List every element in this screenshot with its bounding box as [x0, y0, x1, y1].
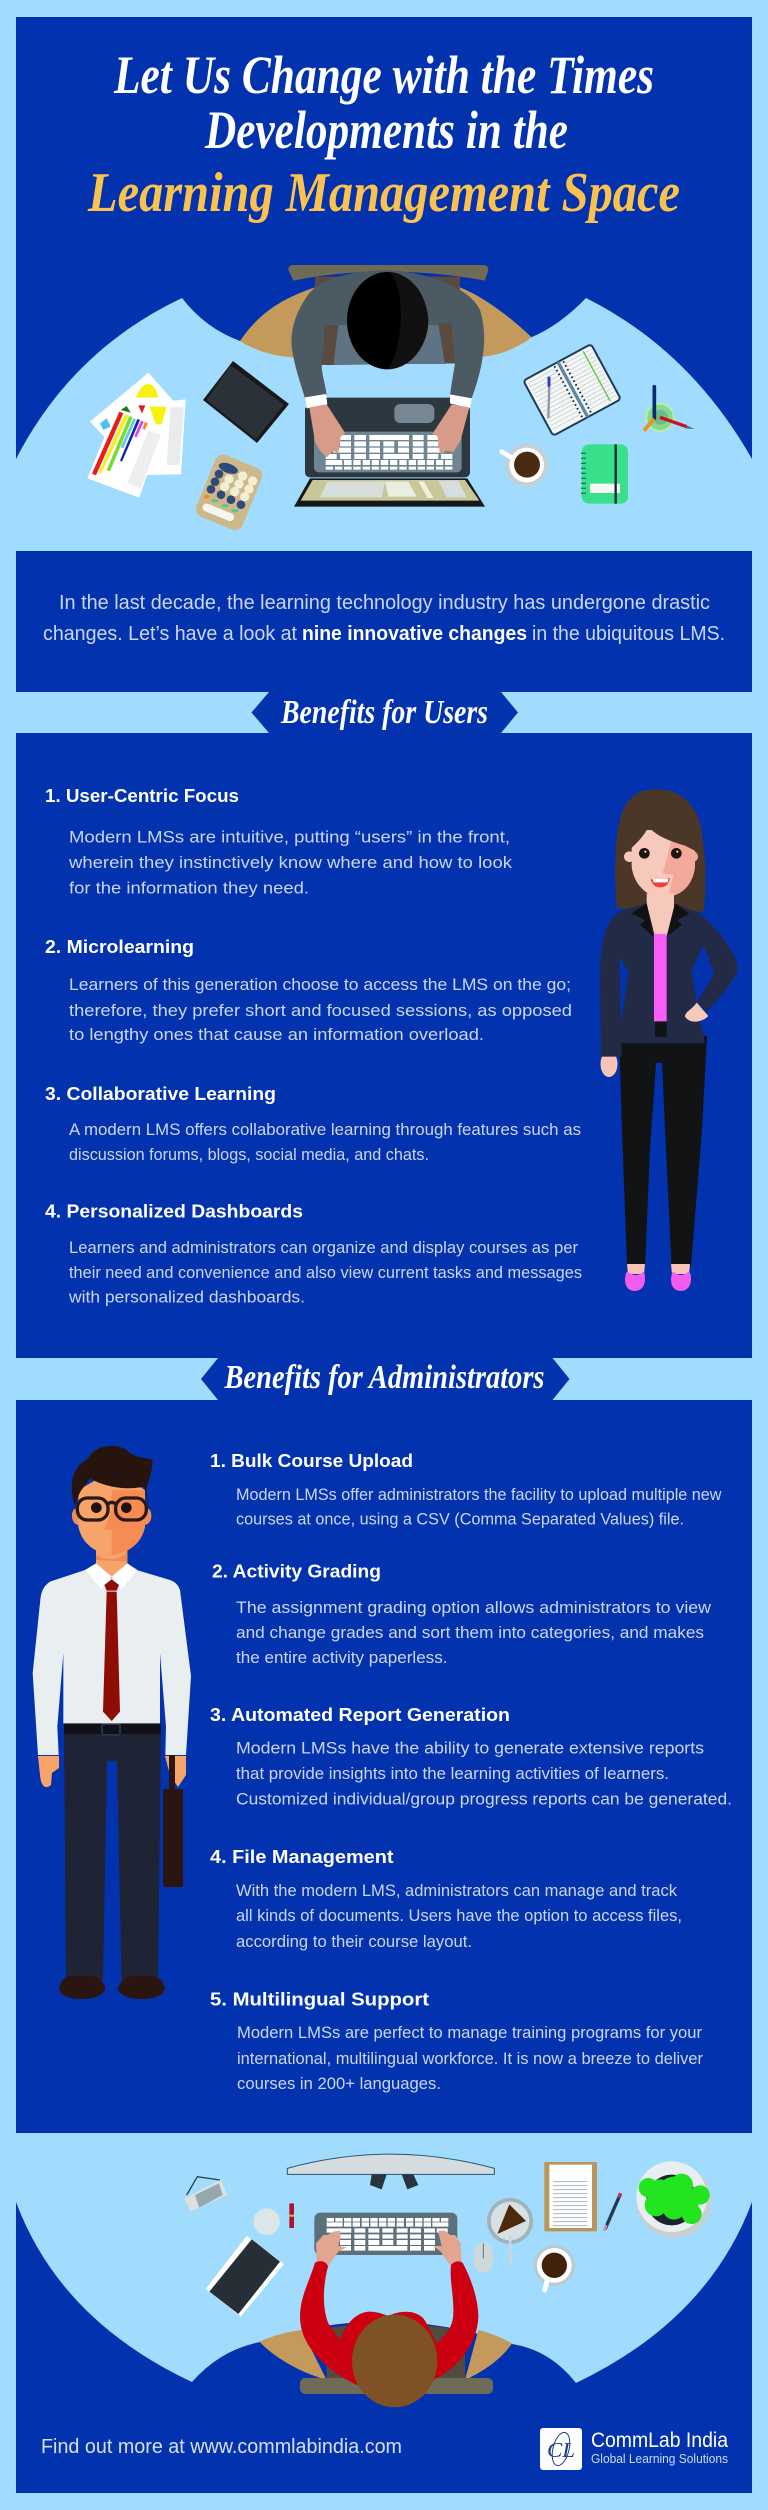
footer blue background	[16, 2133, 752, 2493]
item 4: 4. File Management	[210, 1846, 394, 1867]
item 5: international, multilingual workforce. It is now a breeze to deliver	[237, 2050, 703, 2068]
item 4: their need and convenience and also view current tasks and messages	[69, 1264, 582, 1282]
green ribbon	[583, 351, 610, 401]
hair	[615, 789, 705, 912]
item 3: discussion forums, blogs, social media, and chats.	[69, 1146, 429, 1164]
saucer	[505, 444, 548, 486]
hero blue background	[16, 17, 752, 551]
handle	[545, 2280, 547, 2290]
hands	[309, 404, 469, 457]
tablet screen	[209, 2239, 280, 2314]
label	[590, 484, 620, 493]
hair shine	[387, 273, 428, 369]
mouse	[474, 2243, 493, 2273]
clipboard	[544, 2162, 597, 2231]
holder rim	[645, 403, 675, 432]
keyboard body	[314, 2213, 457, 2255]
screen panel	[438, 481, 467, 497]
spiral spine	[558, 362, 588, 417]
upper body	[600, 789, 738, 1057]
lipstick	[289, 2203, 294, 2228]
torso shading	[333, 325, 445, 364]
teeth	[653, 879, 668, 882]
holder body	[647, 405, 673, 430]
item 4: according to their course layout.	[236, 1933, 472, 1951]
admin background	[16, 1400, 752, 2133]
chair tan base	[240, 287, 532, 357]
cup	[537, 2248, 572, 2283]
calculator cream buttons	[220, 471, 257, 501]
intro line 2: nine innovative changes	[302, 623, 527, 645]
monitor stand	[370, 2174, 418, 2189]
footer desk shape	[16, 2133, 752, 2383]
panel: benefits for administrators	[16, 1400, 752, 2133]
panel: footer	[16, 2133, 752, 2493]
handle	[502, 452, 515, 459]
blue pen	[649, 387, 660, 418]
ribbon: benefits for users: Benefits for Users	[280, 694, 488, 731]
face	[632, 830, 695, 897]
head	[352, 2315, 437, 2407]
cover	[582, 444, 628, 504]
shirt	[33, 1570, 191, 1755]
item 4: Learners and administrators can organize and display courses as per	[69, 1239, 578, 1257]
green notebook	[581, 444, 628, 504]
panel: benefits for users	[16, 733, 752, 1358]
face shade	[663, 840, 695, 897]
buckle	[102, 1724, 120, 1735]
holder inside	[653, 410, 668, 425]
item 2: 2. Microlearning	[45, 936, 194, 957]
saucer	[636, 2161, 707, 2232]
plant	[636, 2161, 711, 2238]
item 2: to lengthy ones that cause an information overload.	[69, 1026, 484, 1044]
eyes	[639, 848, 682, 859]
collar	[85, 1563, 137, 1589]
panel: hero	[16, 17, 752, 551]
item 4: all kinds of documents. Users have the option to access files,	[236, 1907, 682, 1925]
item 2	[212, 1560, 711, 1667]
item 1: wherein they instinctively know where and how to look	[68, 854, 513, 872]
phone screen	[195, 2183, 223, 2208]
intro line 2	[43, 623, 725, 645]
pen cap	[544, 377, 553, 387]
red pen	[660, 417, 687, 427]
item 2: therefore, they prefer short and focused sessions, as opposed	[69, 1002, 572, 1020]
panel: intro	[16, 551, 752, 692]
pen end	[604, 2225, 606, 2231]
monitor	[287, 2154, 494, 2174]
briefcase handle	[169, 1753, 175, 1789]
item 1: Modern LMSs are intuitive, putting “users” in the front,	[69, 828, 510, 846]
tie	[103, 1592, 120, 1721]
pen	[605, 2193, 621, 2229]
item 2: the entire activity paperless.	[236, 1649, 448, 1667]
neck	[647, 893, 674, 937]
logo ring	[549, 2431, 573, 2467]
chair back	[327, 2324, 465, 2385]
paper text block	[167, 407, 184, 465]
mouth	[651, 878, 670, 887]
illustration: desk items right	[474, 2161, 711, 2290]
intro line 2: in the ubiquitous LMS.	[532, 623, 725, 645]
fringe	[628, 820, 698, 852]
jacket	[291, 270, 484, 398]
screen surface	[301, 480, 479, 501]
users background	[16, 733, 752, 1358]
item 2: The assignment grading option allows administrators to view	[236, 1599, 711, 1617]
clipboard lines	[553, 2182, 587, 2226]
item 4	[45, 1200, 582, 1306]
notebook pages	[523, 344, 621, 436]
screen windows	[320, 482, 385, 497]
laptop	[294, 398, 485, 507]
item 1: 1. Bulk Course Upload	[210, 1450, 413, 1471]
coffee	[542, 2253, 567, 2278]
illustration: papers, tablet and calculator	[87, 361, 289, 533]
title	[87, 45, 680, 224]
front paper text block	[127, 431, 161, 488]
left hand	[600, 1051, 618, 1077]
intro line 1: In the last decade, the learning technology industry has undergone drastic	[59, 592, 710, 614]
item 2: Learners of this generation choose to access the LMS on the go;	[69, 976, 571, 994]
logo tagline: Global Learning Solutions	[591, 2451, 728, 2466]
briefcase	[163, 1789, 183, 1887]
shoes	[625, 1272, 691, 1291]
item 2	[45, 936, 572, 1044]
keys	[326, 435, 452, 470]
logo letters: CL	[547, 2438, 575, 2462]
chair back	[315, 277, 460, 323]
item 1: for the information they need.	[69, 880, 309, 898]
head	[347, 272, 428, 369]
pink top	[654, 934, 667, 1021]
tablet screen	[207, 365, 284, 439]
pants	[64, 1733, 161, 1980]
cup	[509, 448, 544, 482]
logo tile	[540, 2428, 582, 2470]
screen document	[385, 482, 417, 497]
ribbon: benefits for administrators: Benefits for Administrators	[224, 1359, 544, 1396]
ankles	[627, 1264, 690, 1274]
belt area	[655, 1022, 667, 1037]
lapels	[632, 903, 689, 937]
right hand	[165, 1756, 186, 1787]
right ear	[687, 851, 698, 862]
item 4	[210, 1846, 682, 1951]
eyes	[91, 1502, 132, 1513]
ball	[253, 2208, 280, 2235]
spiral notebook	[523, 344, 621, 436]
blazer	[600, 903, 738, 1057]
cuffs	[305, 394, 472, 408]
item 3: 3. Collaborative Learning	[45, 1083, 276, 1104]
item 1: Modern LMSs offer administrators the facility to upload multiple new	[236, 1486, 722, 1504]
coloured bars	[92, 412, 123, 475]
illustration: notebooks, coffee and pens	[502, 344, 695, 504]
shoes	[59, 1976, 165, 1999]
calculator	[193, 452, 265, 533]
hands	[316, 2231, 462, 2267]
leaves	[639, 2174, 710, 2224]
touch area	[394, 404, 434, 423]
ears	[72, 1508, 151, 1525]
item 3: A modern LMS offers collaborative learning through features such as	[69, 1121, 581, 1139]
title line 3: Learning Management Space	[87, 162, 680, 224]
face shade	[104, 1490, 145, 1555]
paper front	[87, 412, 162, 498]
tie knot	[104, 1579, 119, 1591]
illustration: desk items left	[184, 2177, 294, 2317]
coffee	[514, 452, 540, 478]
sweater	[300, 2261, 478, 2385]
screen bar	[418, 481, 433, 498]
title line 1: Let Us Change with the Times	[113, 45, 654, 105]
hero desk shape	[16, 298, 752, 551]
saucer	[534, 2245, 575, 2286]
footer link: Find out more at www.commlabindia.com	[41, 2435, 402, 2458]
lipstick band	[289, 2215, 294, 2217]
coffee cup	[502, 444, 548, 486]
item 5: 5. Multilingual Support	[210, 1989, 429, 2010]
logo	[540, 2428, 728, 2470]
spiral dots	[554, 361, 592, 418]
chair arms	[322, 323, 455, 365]
belt	[64, 1724, 161, 1734]
plate	[487, 2198, 533, 2244]
hair	[72, 1446, 152, 1505]
fork	[506, 2235, 515, 2267]
item 3	[210, 1704, 732, 1809]
pen holder	[644, 387, 695, 432]
keyboard deck	[314, 432, 462, 472]
pot	[646, 2175, 697, 2225]
item 5: courses in 200+ languages.	[237, 2075, 441, 2093]
item 1: 1. User-Centric Focus	[45, 785, 239, 806]
item 1: courses at once, using a CSV (Comma Separated Values) file.	[236, 1510, 684, 1528]
upper body	[33, 1446, 191, 1755]
chair tan left	[259, 2330, 327, 2380]
hand on hip	[685, 1003, 708, 1022]
neck shade	[96, 1551, 127, 1562]
illustration: woman	[600, 789, 738, 1291]
calculator dark buttons	[207, 461, 245, 509]
title line 2: Developments in the	[204, 100, 568, 160]
item 4: 4. Personalized Dashboards	[45, 1200, 303, 1222]
pen tip	[686, 425, 695, 429]
paper back right	[145, 399, 186, 475]
laptop lid top	[305, 398, 470, 477]
mouse wheel	[482, 2243, 485, 2258]
calculator small keys	[204, 495, 239, 512]
illustration: person at keyboard	[259, 2154, 512, 2407]
calculator display	[201, 502, 235, 522]
pen tip	[619, 2193, 621, 2197]
chair top bar	[288, 265, 488, 281]
item 3: Modern LMSs have the ability to generate extensive reports	[236, 1740, 704, 1758]
item 2: and change grades and sort them into categories, and makes	[236, 1624, 704, 1642]
phone cable	[187, 2177, 220, 2195]
item 4: With the modern LMS, administrators can manage and track	[236, 1882, 678, 1900]
tablet	[206, 2236, 284, 2317]
page lines	[528, 349, 616, 429]
item 5: Modern LMSs are perfect to manage training programs for your	[237, 2024, 703, 2042]
spiral	[581, 453, 586, 493]
item 3: 3. Automated Report Generation	[210, 1704, 510, 1725]
glasses	[77, 1498, 146, 1520]
item 3	[45, 1083, 581, 1164]
chair bar	[300, 2378, 493, 2394]
pants	[619, 1036, 707, 1266]
strap	[612, 444, 619, 504]
clipboard page	[549, 2165, 592, 2228]
item 2: 2. Activity Grading	[212, 1560, 381, 1582]
keyboard keys	[327, 2218, 448, 2251]
item 4: with personalized dashboards.	[68, 1288, 305, 1306]
chart shapes	[136, 384, 158, 398]
paper back left	[90, 373, 174, 450]
plate surface	[491, 2202, 529, 2240]
laptop screen	[294, 478, 485, 507]
logo name: CommLab India	[591, 2429, 728, 2452]
ears	[624, 851, 635, 862]
left hand	[38, 1756, 59, 1787]
intro line 2: changes. Let’s have a look at	[43, 623, 297, 645]
item 1	[210, 1450, 722, 1528]
saucer shadow	[637, 2163, 711, 2238]
pen on notebook	[548, 377, 549, 418]
illustration: man	[33, 1446, 191, 1999]
tablet	[203, 361, 289, 443]
item 3: that provide insights into the learning activities of learners.	[236, 1765, 669, 1783]
item 3: Customized individual/group progress reports can be generated.	[236, 1791, 732, 1809]
intro background	[16, 551, 752, 692]
neck	[96, 1547, 127, 1578]
phone	[184, 2179, 227, 2212]
illustration: person at laptop	[240, 265, 532, 507]
face	[78, 1470, 145, 1555]
item 5	[210, 1989, 703, 2093]
coffee cup	[534, 2245, 575, 2290]
chair tan right	[465, 2330, 512, 2380]
orange pencil	[644, 419, 654, 431]
cake	[497, 2204, 526, 2234]
item 1	[45, 785, 513, 898]
